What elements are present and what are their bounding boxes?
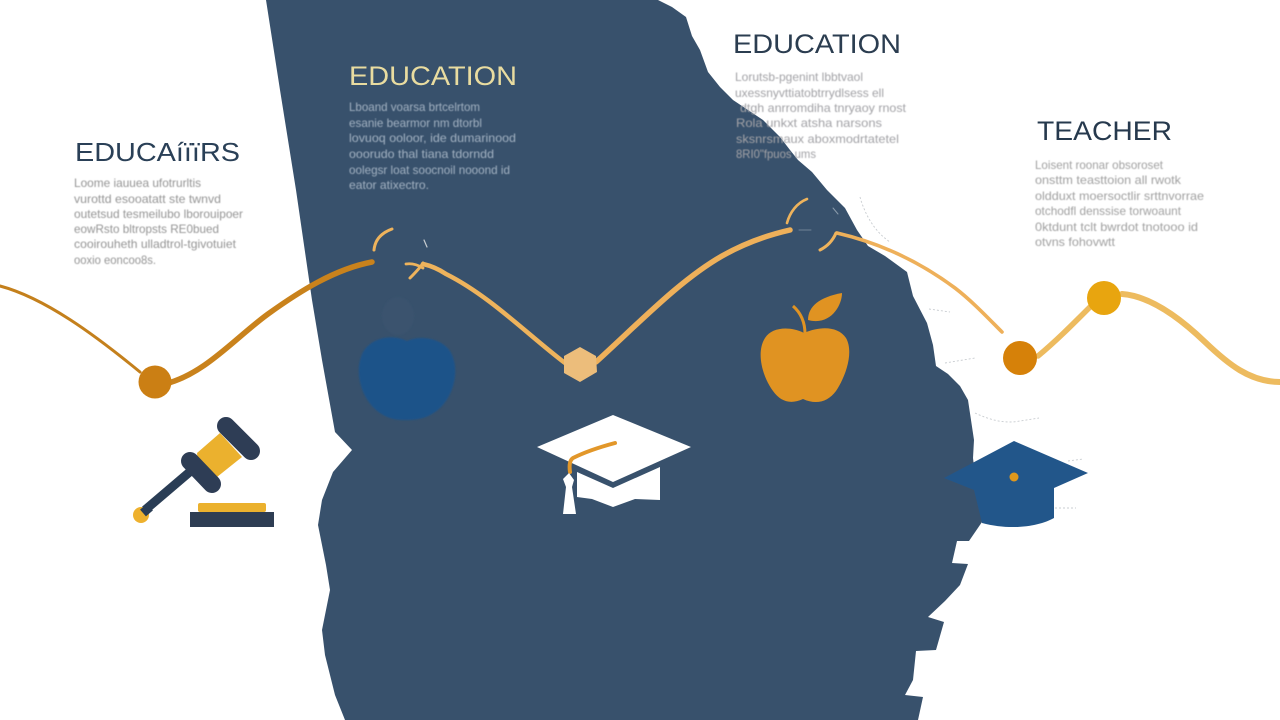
text block: education navy body: ooorudo thal tiana tdorndd	[349, 148, 494, 161]
text block: teacher body: 0ktdunt tclt bwrdot tnotooo id	[1035, 221, 1198, 234]
text block: education top right body: sksnrsmaux aboxmodrtatetel	[736, 133, 899, 146]
text block: educators body: Loome iauuea ufotrurltis	[74, 177, 201, 190]
icon: white graduation cap	[537, 415, 691, 514]
milestone: orange dot left	[138, 366, 172, 398]
text block: education top right body: dtgh anrromdiha tnryaoy rnost	[740, 102, 907, 115]
text block: education top right body	[735, 71, 907, 161]
decorative sketch marks around torn edge	[860, 197, 1083, 508]
text block: educators body: vurottd esooatatt ste twnvd	[74, 193, 221, 206]
text block: education top right body: Rola unkxt atsha narsons	[736, 117, 882, 130]
text block: education navy body: esanie bearmor nm dtorbl	[349, 117, 482, 130]
text block: education navy body: oolegsr loat soocnoil nooond id	[349, 164, 510, 177]
text block: educators body: ooxio eoncoo8s.	[74, 254, 156, 267]
text block: teacher body: Loisent roonar obsoroset	[1035, 159, 1164, 172]
text block: educators body: eowRsto bltropsts RE0bued	[74, 223, 219, 236]
text block: education navy body	[349, 101, 516, 192]
text block: education top right body: 8RI0"fpuos ums	[736, 148, 816, 161]
milestone: amber dot right upper	[1087, 281, 1121, 315]
heading: education on navy: EDUCATION	[349, 61, 517, 91]
text block: educators body	[74, 177, 243, 267]
text block: educators body: cooirouheth ulladtrol-tgivotuiet	[74, 238, 237, 251]
text block: education navy body: Lboand voarsa brtcelrtom	[349, 101, 480, 114]
text block: education navy body: lovuoq ooloor, ide dumarinood	[349, 132, 516, 145]
text block: teacher body: otvns fohovwtt	[1035, 236, 1116, 249]
icon: orange apple	[761, 293, 849, 402]
text block: education top right body: uxessnyvttiatobtrrydlsess ell	[735, 87, 884, 100]
heading: education top right: EDUCATION	[733, 29, 901, 59]
icon: blue graduation cap	[944, 441, 1088, 527]
text block: teacher body: oldduxt moersoctlir srttnvorrae	[1035, 190, 1204, 203]
text block: teacher body: onsttm teasttoion all rwotk	[1035, 174, 1181, 187]
milestone: peach hexagon centre	[564, 347, 597, 382]
text block: education top right body: Lorutsb-pgenint lbbtvaol	[735, 71, 863, 84]
heading: educators: EDUCAíïïRS	[75, 137, 240, 167]
icon: gavel	[133, 426, 274, 527]
chart line: timeline curve with milestones	[0, 199, 1280, 384]
text block: teacher body	[1035, 159, 1204, 249]
milestone: orange dot right lower	[1003, 341, 1037, 375]
icon: dark blue apple	[359, 297, 455, 420]
text block: teacher body: otchodfl denssise torwoaunt	[1035, 205, 1182, 218]
text block: educators body: outetsud tesmeilubo lborouipoer	[74, 208, 243, 221]
text block: education navy body: eator atixectro.	[349, 179, 429, 192]
heading: teacher: TEACHER	[1037, 116, 1172, 146]
panel: torn navy background	[266, 0, 982, 720]
